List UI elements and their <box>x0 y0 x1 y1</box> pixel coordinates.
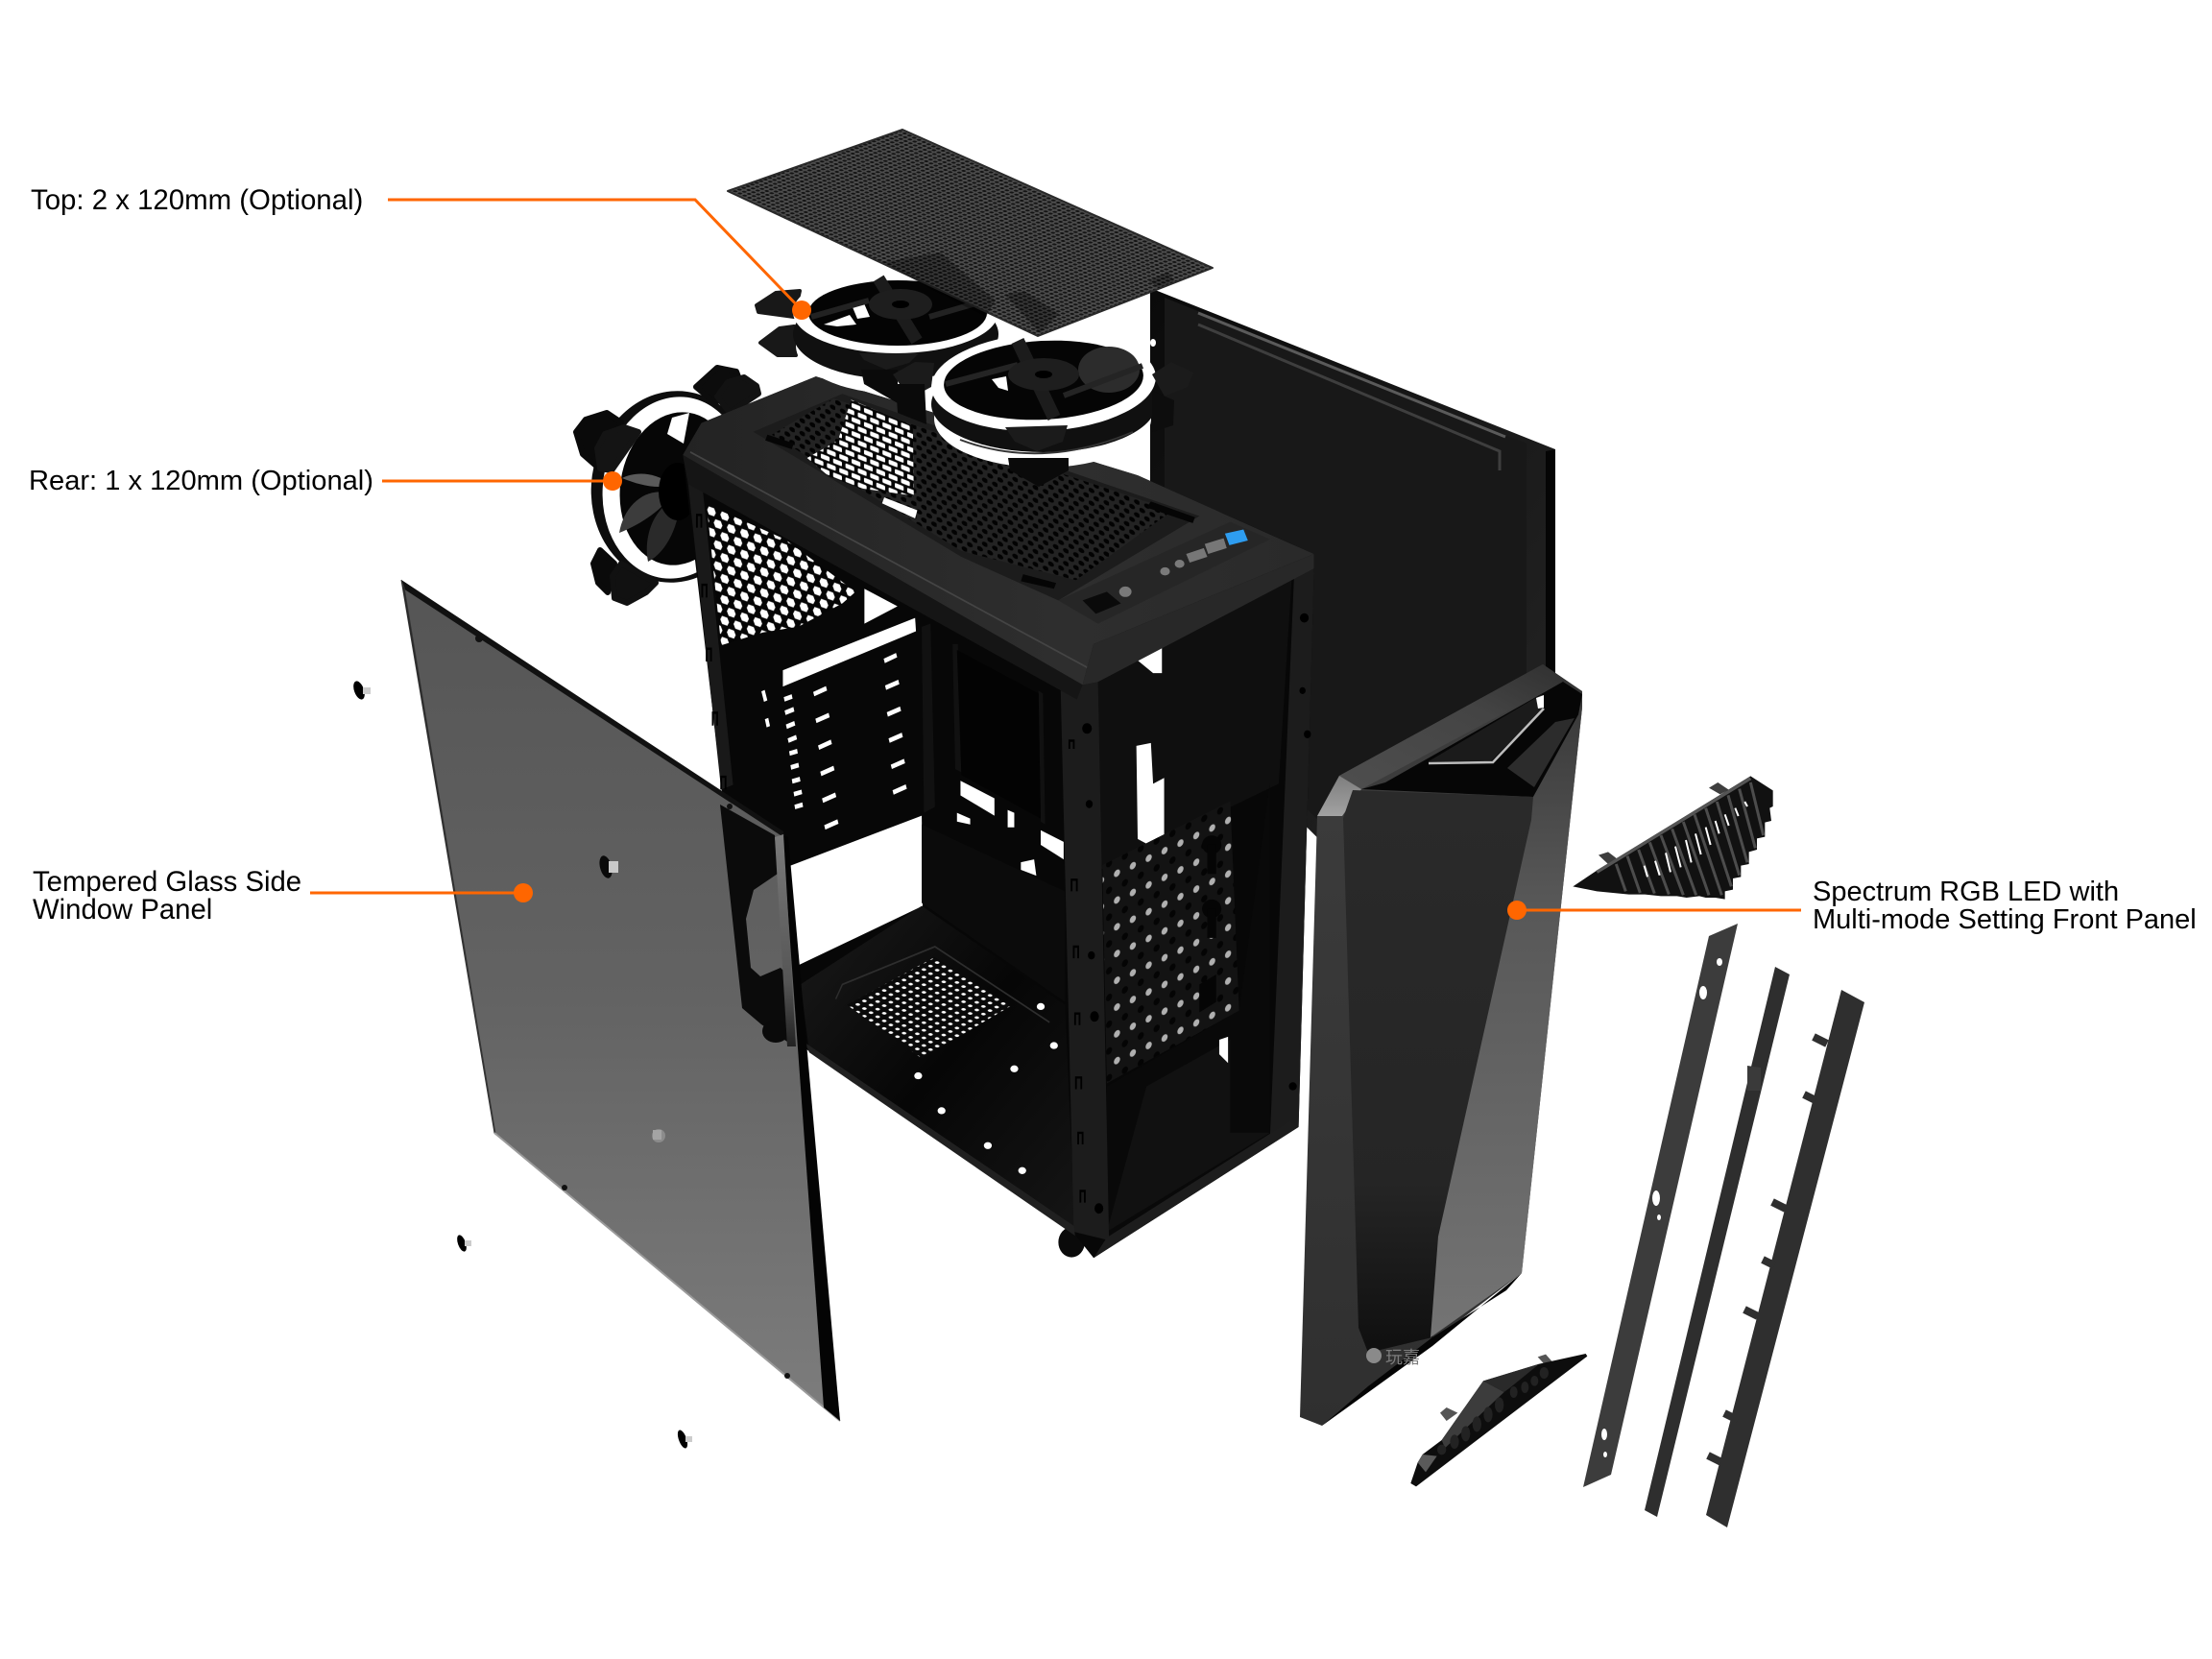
callout: top fans <box>31 184 811 320</box>
lower guide rear face <box>1483 1364 1539 1392</box>
top cover plate <box>683 376 1314 685</box>
frame foot through glass <box>762 1020 789 1043</box>
rear hex vent <box>707 504 855 645</box>
right compartment <box>1098 574 1292 871</box>
rear left post <box>687 475 733 789</box>
bevel highlight <box>690 452 1087 667</box>
lower black wedge <box>1322 1273 1522 1426</box>
glass mount holes <box>475 635 790 1379</box>
front panel <box>1300 664 1582 1426</box>
tempered glass panel <box>401 580 840 1421</box>
top cover inset <box>754 394 1199 600</box>
glass left edge <box>401 580 495 1134</box>
top slots dark <box>765 435 1195 589</box>
logo <box>1366 1348 1420 1367</box>
drive bay slots <box>763 655 906 828</box>
drive cage perforated plate <box>1102 801 1239 1083</box>
loose thumb screw three <box>676 1429 692 1450</box>
loose thumb screw one <box>351 680 371 701</box>
right light facet <box>1431 708 1582 1337</box>
top slot <box>882 497 917 518</box>
upper guide teeth <box>1616 782 1764 895</box>
top open hex area <box>807 399 914 495</box>
panel body <box>1300 664 1582 1426</box>
logo: 玩嘉 <box>1385 1348 1420 1367</box>
callout: front panel: Multi-mode Setting Front Panel <box>1813 904 2197 935</box>
lower guide beads <box>1437 1367 1549 1455</box>
view through opening <box>1429 694 1544 761</box>
lower guide end cap <box>1418 1455 1437 1472</box>
case chassis <box>683 376 1314 1258</box>
glass right edge lit <box>775 834 796 1046</box>
callout: glass panel <box>33 866 533 926</box>
inner facet highlight <box>1507 718 1575 787</box>
top opening <box>1361 682 1582 797</box>
fan one <box>757 271 998 424</box>
thumb screw on glass <box>597 854 618 879</box>
post screw holes <box>1082 613 1310 1214</box>
case floor <box>801 906 1075 1232</box>
trim strip two <box>1645 967 1790 1517</box>
lower guide tabs <box>1440 1355 1553 1421</box>
dark central face <box>1343 790 1533 1353</box>
front left post <box>1061 682 1109 1240</box>
glass pane <box>401 580 840 1421</box>
front I/O panel <box>1058 522 1270 624</box>
audio ports <box>1119 560 1185 597</box>
interior uprights <box>922 624 1065 1002</box>
callout: front panel <box>1507 877 2197 935</box>
open bays <box>782 589 1064 965</box>
chassis silhouette <box>683 376 1314 1258</box>
upper guide slits <box>1645 802 1747 877</box>
floor tray outline <box>836 947 1049 1022</box>
trim strip one <box>1583 924 1738 1487</box>
callout: rear fan <box>29 466 622 496</box>
top cover skirt <box>683 455 1083 699</box>
fan two <box>928 327 1193 487</box>
top perforation <box>772 398 1173 580</box>
top corner highlight <box>1317 776 1361 816</box>
callout: glass panel: Window Panel <box>33 894 212 926</box>
top dust filter mesh <box>728 130 1213 336</box>
loose thumb screw two <box>455 1234 471 1253</box>
front foot <box>1058 1227 1085 1258</box>
trim strip three <box>1706 990 1864 1527</box>
post slots <box>697 515 1085 1203</box>
rear side panel <box>1150 288 1555 864</box>
rear fan <box>576 368 769 603</box>
top bar <box>1339 664 1582 789</box>
keyhole mounts <box>1199 835 1221 1012</box>
floor stand-offs <box>914 1003 1058 1174</box>
callout: glass panel: Tempered Glass Side <box>33 866 301 898</box>
motherboard tray <box>957 650 1041 819</box>
front right post <box>1270 568 1314 1139</box>
USB ports <box>1187 529 1248 563</box>
opening white gap <box>1536 695 1544 709</box>
power button <box>1083 591 1121 613</box>
callout: top fans: Top: 2 x 120mm (Optional) <box>31 184 363 216</box>
upper guide rail <box>1597 779 1750 872</box>
upper guide tabs <box>1599 782 1729 864</box>
lower guide upper face <box>1442 1381 1504 1448</box>
glass bottom edge <box>494 1133 840 1421</box>
glass right edge black <box>782 835 840 1421</box>
lower guide body <box>1410 1354 1587 1486</box>
faint thumb screw <box>652 1129 665 1142</box>
fan one left brackets <box>757 291 800 355</box>
callout: front panel: Spectrum RGB LED with <box>1813 877 2119 907</box>
glass top edge <box>401 580 783 837</box>
chassis seen through glass <box>720 805 790 1044</box>
floor vent <box>847 957 1011 1058</box>
opening highlight <box>1429 709 1544 763</box>
callout: rear fan: Rear: 1 x 120mm (Optional) <box>29 466 373 496</box>
rear fan corner brackets <box>576 368 758 603</box>
lower LED light guide <box>1410 1354 1587 1486</box>
upper LED light guide <box>1573 776 1773 900</box>
bottom rail <box>805 1043 1075 1236</box>
upper guide body <box>1573 776 1773 900</box>
